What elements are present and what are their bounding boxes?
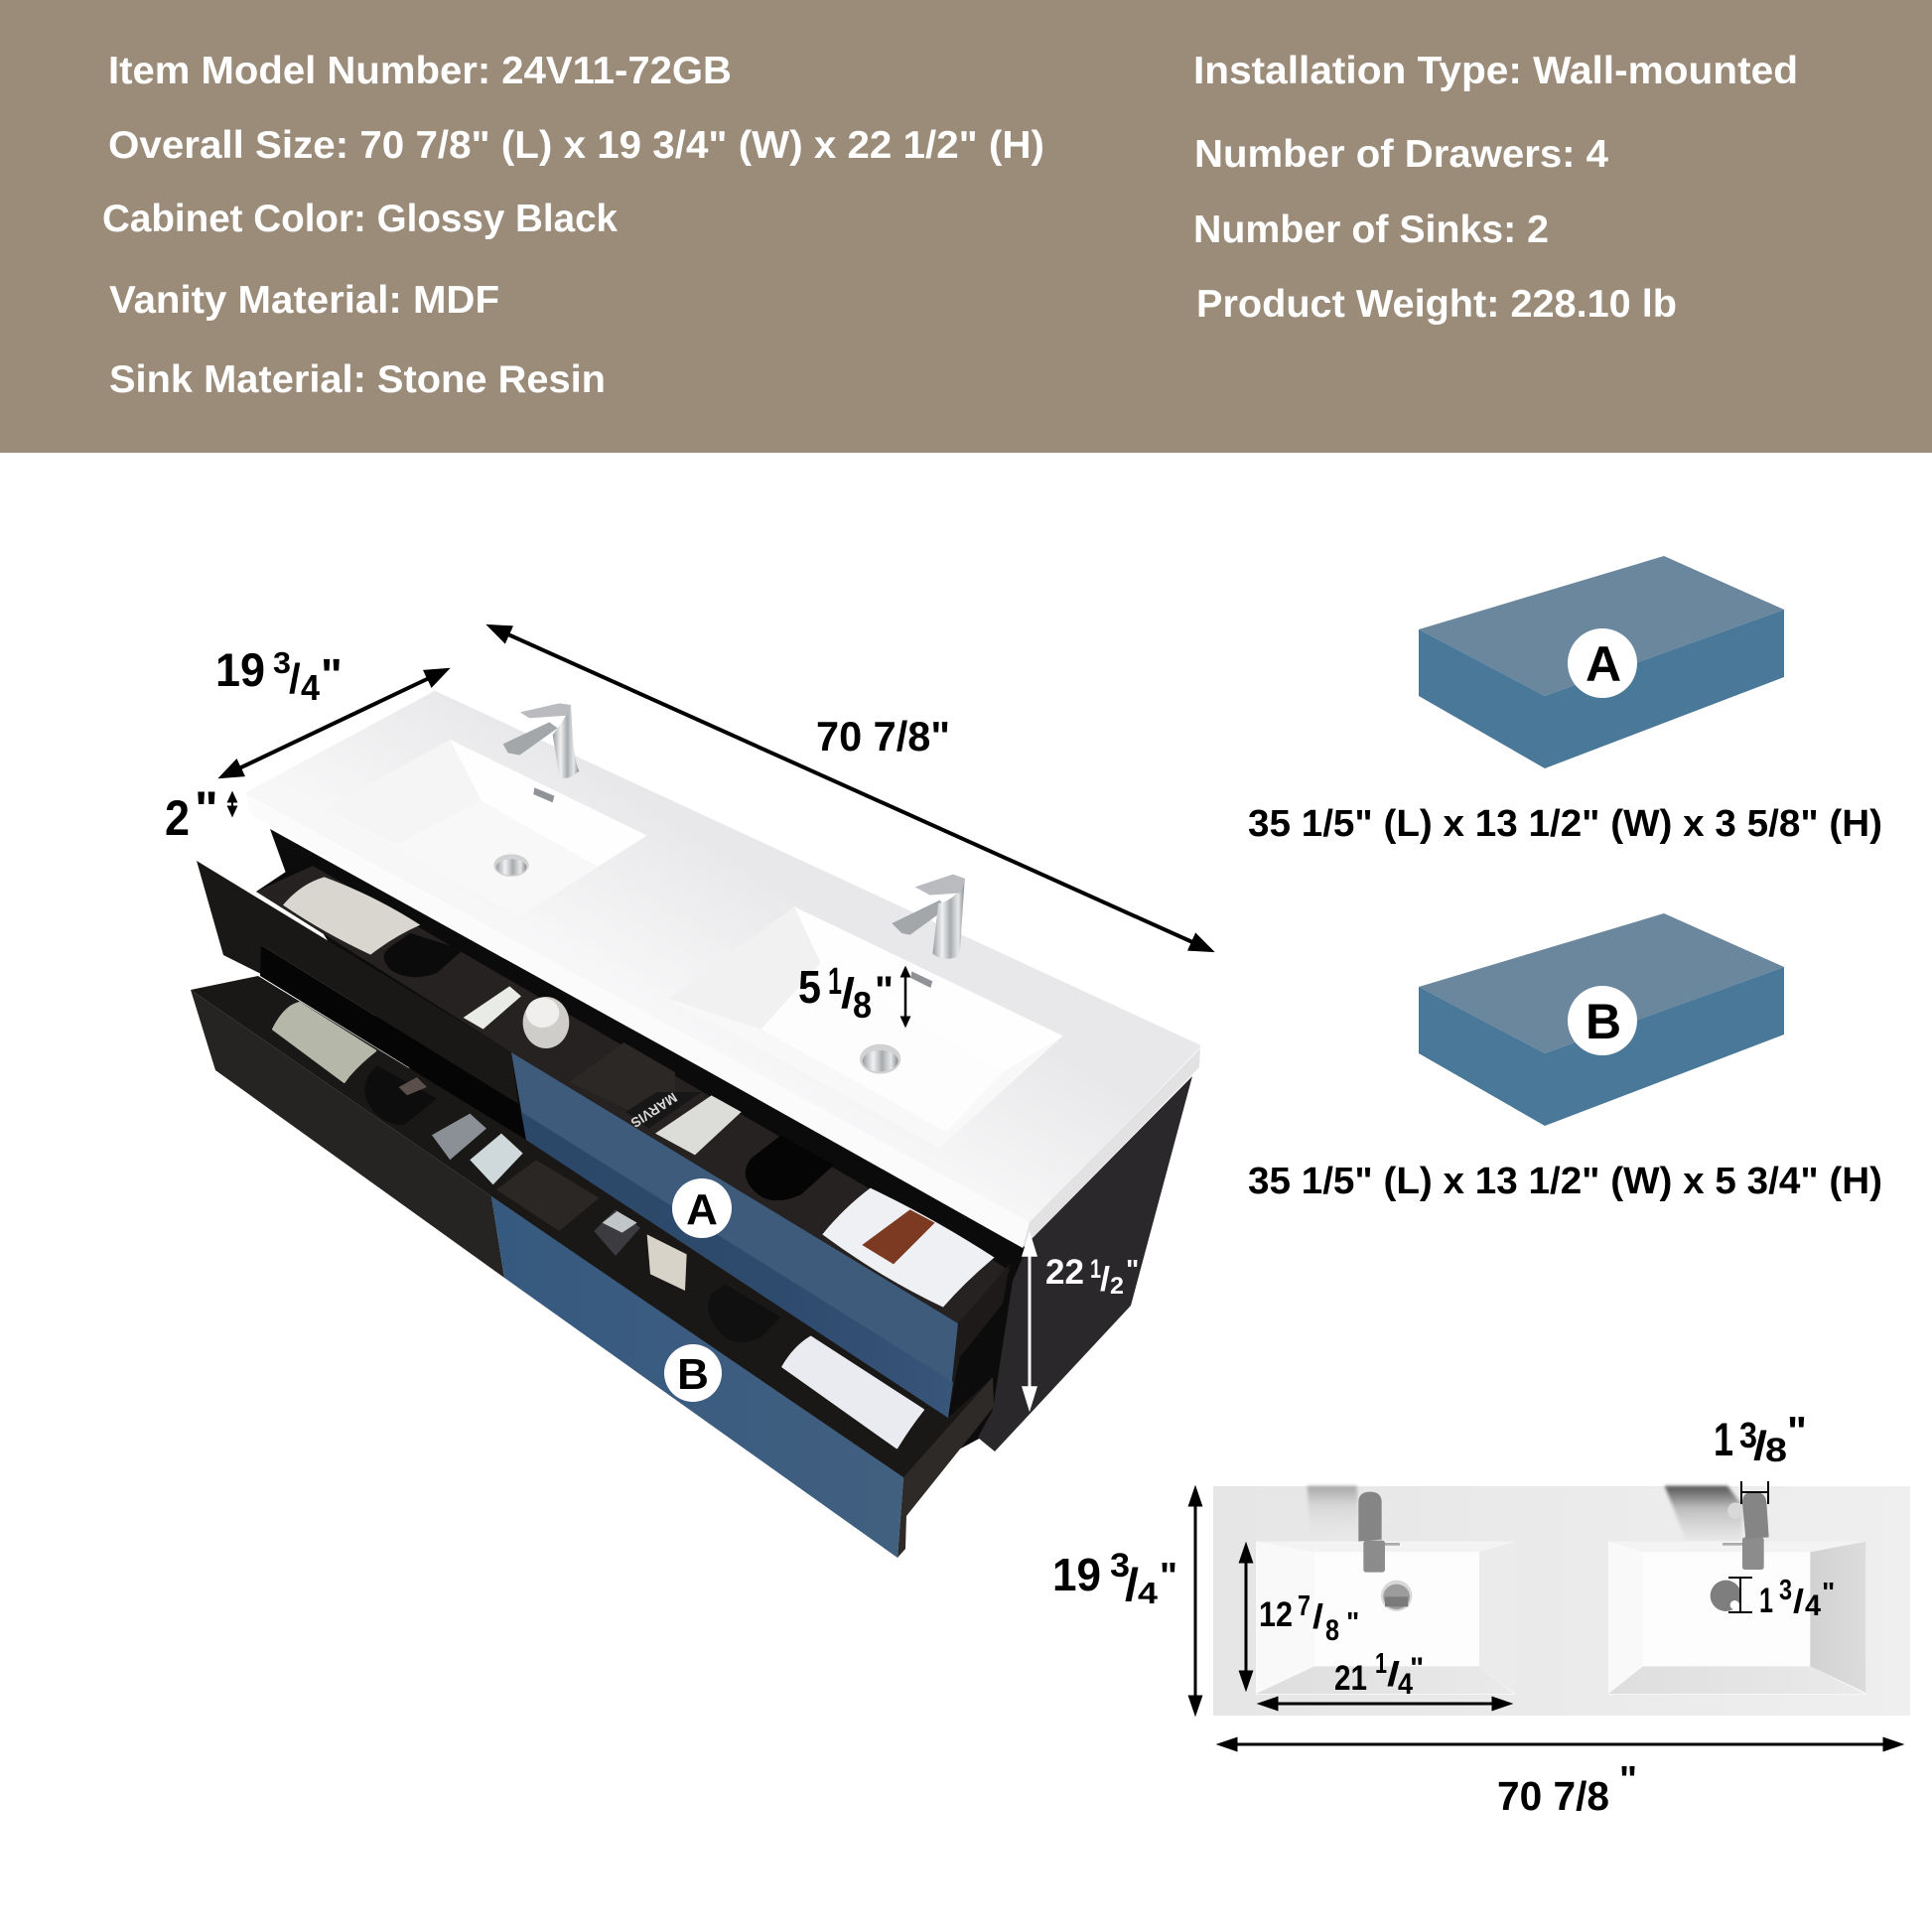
gray box xyxy=(594,1209,640,1256)
faucet upper xyxy=(1742,1492,1769,1539)
spec: cabinet color: Cabinet Color: Glossy Black xyxy=(102,198,618,240)
black gap strip xyxy=(260,945,526,1140)
brown sachet xyxy=(862,1209,935,1264)
lower drawer side xyxy=(897,1377,994,1558)
dimension: basin depth 5 1/8: 5 xyxy=(798,961,821,1013)
dimension: depth 19 3/4: / xyxy=(289,655,301,702)
box B top xyxy=(1419,913,1784,1053)
cabinet right side panel xyxy=(978,1076,1192,1451)
dimension: basin 21 1/4: 1 xyxy=(1375,1648,1387,1680)
drawer diagram B xyxy=(1419,913,1784,1126)
countertop top surface xyxy=(248,693,1198,1220)
faucet shadow left xyxy=(1308,1486,1360,1541)
tray recess xyxy=(746,1135,834,1200)
dimension: height 22 1/2: 1 xyxy=(1090,1254,1101,1284)
dimension: plan length 70 7/8: " xyxy=(1619,1759,1637,1801)
dimension: basin 21 1/4: 4 xyxy=(1398,1668,1413,1701)
dimension: depth 19 3/4: 19 xyxy=(215,643,265,696)
blue drawer front B xyxy=(491,1196,903,1558)
faucet lower xyxy=(1363,1541,1385,1573)
blue front darker band xyxy=(521,1112,953,1418)
dimension: faucet 1 3/8: 3 xyxy=(1739,1415,1757,1455)
label B: B xyxy=(1586,994,1621,1049)
box B right side xyxy=(1545,967,1784,1126)
dimension: basin 12 7/8: 8 xyxy=(1325,1614,1339,1647)
tray highlight xyxy=(399,1077,427,1095)
dimension: drain 1 3/4: " xyxy=(1822,1577,1835,1607)
dimension: basin depth 5 1/8: / xyxy=(841,970,855,1018)
countertop front edge xyxy=(246,795,1030,1248)
dimension: drain 1 3/4: 1 xyxy=(1759,1582,1773,1620)
left basin top view xyxy=(1256,1486,1515,1695)
upper drawer right contents xyxy=(625,1092,995,1308)
drawer B size: 35 1/5" (L) x 13 1/2" (W) x 5 3/4" (H) xyxy=(1248,1161,1882,1202)
dimension: faucet 1 3/8: 1 xyxy=(1714,1413,1733,1465)
spec: product weight: Product Weight: 228.10 lb xyxy=(1196,283,1677,326)
arrow: depth of vanity xyxy=(222,670,446,776)
bracket: drain diameter xyxy=(1728,1578,1752,1612)
dimension: height 22 1/2 xyxy=(1045,1253,1139,1300)
upper drawer left contents xyxy=(283,877,675,1112)
lower drawer right contents xyxy=(647,1234,923,1448)
dimension: plan depth 19 3/4: 4 xyxy=(1138,1576,1159,1610)
circle label A: A xyxy=(686,1185,718,1234)
arrow: basin width xyxy=(1245,1546,1247,1688)
drain xyxy=(493,854,529,877)
dimension: basin 21 1/4: 21 xyxy=(1334,1659,1367,1698)
arrow: plan length xyxy=(1220,1743,1900,1745)
faucet base xyxy=(1727,1502,1744,1519)
overflow xyxy=(533,787,554,802)
drain xyxy=(860,1044,900,1074)
spec: vanity material: Vanity Material: MDF xyxy=(109,279,499,322)
dimension: plan depth 19 3/4: 19 xyxy=(1052,1549,1101,1600)
white towel xyxy=(822,1188,995,1308)
dimension: depth 19 3/4: 3 xyxy=(273,645,291,680)
dimension: basin 12 7/8: / xyxy=(1312,1598,1324,1636)
pale blue box xyxy=(470,1134,523,1184)
dimension: basin 12 7/8: " xyxy=(1346,1606,1359,1637)
overflow xyxy=(910,971,932,988)
bracket: faucet diameter xyxy=(1741,1481,1768,1504)
dimension: length 70 7/8: 70 7/8" xyxy=(816,713,950,759)
label B xyxy=(1568,986,1637,1055)
dimension: faucet 1 3/8: 8 xyxy=(1765,1432,1787,1469)
dimension: basin 12 7/8 xyxy=(1259,1590,1359,1647)
blue drawer front A xyxy=(511,1052,958,1418)
white soap box xyxy=(655,1095,742,1155)
top view of sink top xyxy=(1213,1486,1910,1716)
lower drawer contents xyxy=(273,1003,640,1256)
dimension: plan length 70 7/8 xyxy=(1497,1759,1637,1819)
lower drawer interior xyxy=(191,976,993,1477)
upper drawer interior xyxy=(256,854,1028,1323)
right basin top view xyxy=(1608,1486,1865,1695)
faucet upper xyxy=(1358,1492,1382,1542)
silver canister xyxy=(432,1114,486,1160)
dimension: depth 19 3/4: 4 xyxy=(301,667,320,708)
sage towel xyxy=(273,1003,375,1082)
tray recess xyxy=(384,933,464,977)
arrow: top thickness xyxy=(231,793,233,815)
spec: sink material: Sink Material: Stone Resin xyxy=(109,358,606,401)
dimension: faucet 1 3/8: " xyxy=(1787,1408,1807,1454)
dimension: plan depth 19 3/4: " xyxy=(1160,1556,1177,1597)
dimension: basin 12 7/8: 7 xyxy=(1298,1590,1311,1622)
dimension: height 22 1/2: 22 xyxy=(1045,1253,1084,1292)
white towel xyxy=(782,1337,923,1448)
dimension: basin depth 5 1/8: " xyxy=(875,969,894,1013)
dimension: basin depth 5 1/8 xyxy=(798,961,894,1026)
marvis label: MARVIS xyxy=(628,1089,680,1131)
dimension: thickness 2 xyxy=(165,781,218,846)
drawer diagram A xyxy=(1419,556,1784,768)
dimension: drain 1 3/4: 3 xyxy=(1779,1575,1792,1606)
sink basin left xyxy=(325,703,647,916)
compartment xyxy=(496,1160,599,1231)
spec: item model number: Item Model Number: 24V11-72GB xyxy=(108,50,732,92)
arrow: basin depth xyxy=(904,968,906,1026)
label A: A xyxy=(1586,636,1621,692)
dimension: plan length 70 7/8: 70 7/8 xyxy=(1497,1773,1609,1819)
dimension: basin depth 5 1/8: 1 xyxy=(828,961,842,1003)
faucet left xyxy=(503,703,579,778)
dimension: height 22 1/2: " xyxy=(1126,1254,1139,1285)
marvis box xyxy=(625,1092,702,1129)
box A top xyxy=(1419,556,1784,696)
countertop right edge xyxy=(1023,1048,1200,1248)
dimension: plan depth 19 3/4: 3 xyxy=(1110,1547,1130,1585)
arrow: vanity height xyxy=(1029,1236,1031,1407)
circle label B: B xyxy=(677,1350,709,1399)
dimension: basin 12 7/8: 12 xyxy=(1259,1595,1293,1634)
lower drawer black front xyxy=(191,990,504,1278)
panel: specifications header xyxy=(0,0,1932,453)
arrow: plan depth xyxy=(1193,1489,1197,1713)
overflow xyxy=(1723,1543,1742,1546)
white bottle xyxy=(647,1234,687,1291)
spec: number of sinks: Number of Sinks: 2 xyxy=(1193,208,1549,251)
cabinet body xyxy=(270,829,1028,1479)
sink basin right xyxy=(668,875,1063,1148)
dimension: faucet 1 3/8: / xyxy=(1753,1423,1767,1468)
dimension: depth 19 3/4: " xyxy=(321,649,343,701)
circle label B xyxy=(664,1344,722,1402)
upper drawer floor xyxy=(256,866,1010,1323)
gray box label xyxy=(603,1211,637,1233)
spec: installation type: Installation Type: Wall-mounted xyxy=(1193,50,1798,92)
dimension: drain 1 3/4: / xyxy=(1793,1583,1804,1619)
gray towel xyxy=(283,877,420,955)
upper drawer side xyxy=(948,1264,1010,1418)
dimension: height 22 1/2: / xyxy=(1100,1261,1111,1299)
dimension: basin 21 1/4: " xyxy=(1410,1652,1424,1685)
dimension: thickness 2: 2 xyxy=(165,790,190,846)
drain xyxy=(1711,1581,1741,1611)
tray recess xyxy=(364,1065,437,1125)
dimension: drain 1 3/4: 4 xyxy=(1805,1589,1821,1622)
dimension: basin 21 1/4 xyxy=(1334,1648,1424,1701)
arrow: basin length xyxy=(1261,1702,1509,1706)
dimension: basin depth 5 1/8: 8 xyxy=(853,985,872,1026)
drain xyxy=(1381,1581,1412,1611)
box B left side xyxy=(1419,987,1545,1126)
tray recess xyxy=(708,1284,781,1342)
dimension: height 22 1/2: 2 xyxy=(1110,1273,1124,1300)
upper drawer black front xyxy=(197,861,518,1104)
white tube xyxy=(464,986,521,1030)
circle label A xyxy=(672,1178,732,1238)
label A xyxy=(1568,628,1637,698)
dimension: drain 1 3/4 xyxy=(1759,1575,1835,1622)
compartment xyxy=(569,1042,675,1112)
dimension: depth 19 3/4 xyxy=(215,643,343,708)
dimension: plan depth 19 3/4: / xyxy=(1125,1559,1139,1610)
box A right side xyxy=(1545,610,1784,768)
faucet base xyxy=(1376,1502,1396,1522)
faucet shadow right xyxy=(1665,1486,1742,1541)
dimension: faucet 1 3/8 xyxy=(1714,1408,1807,1469)
spec: overall size: Overall Size: 70 7/8" (L) x 19 3/4" (W) x 22 1/2" (H) xyxy=(108,124,1044,167)
vanity illustration xyxy=(191,693,1200,1558)
overflow xyxy=(1383,1543,1400,1546)
faucet right xyxy=(892,875,965,959)
drawer A size: 35 1/5" (L) x 13 1/2" (W) x 3 5/8" (H) xyxy=(1248,803,1882,845)
spec: number of drawers: Number of Drawers: 4 xyxy=(1194,133,1608,176)
faucet lower xyxy=(1742,1537,1764,1570)
arrow: length of vanity xyxy=(490,626,1210,950)
box A left side xyxy=(1419,629,1545,768)
jar lid xyxy=(526,998,559,1028)
dimension: thickness 2: " xyxy=(195,781,218,837)
cream jar xyxy=(523,997,569,1048)
plate xyxy=(1213,1486,1910,1716)
dimension: basin 21 1/4: / xyxy=(1387,1656,1401,1694)
dimension: plan depth 19 3/4 xyxy=(1052,1547,1177,1610)
